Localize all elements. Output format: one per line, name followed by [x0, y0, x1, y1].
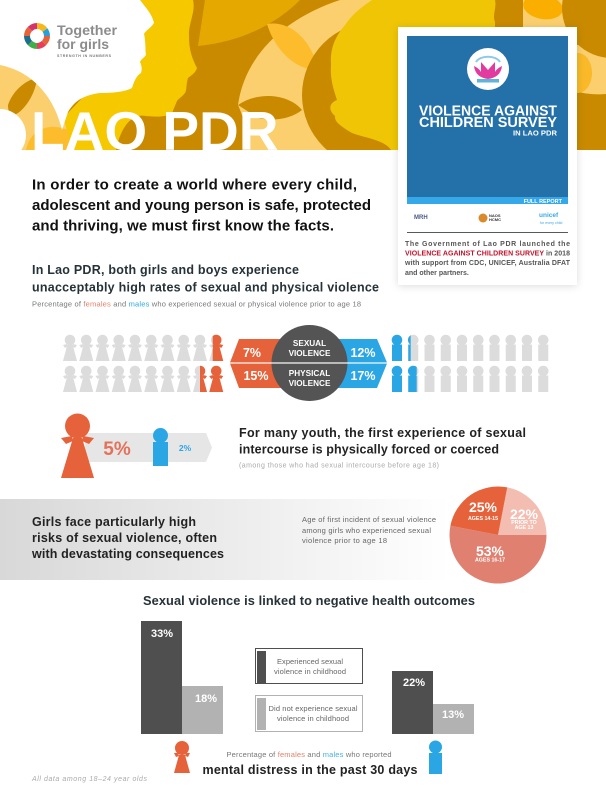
pictogram: males physical violence row: [392, 366, 549, 392]
legend: did not experience sexual violence: Did not experience sexual: [268, 704, 358, 713]
caption: mental distress: [202, 750, 418, 777]
report card: unicef: [539, 212, 559, 219]
forced first experience comparison: [61, 414, 212, 478]
panel: girls risk band: Age of first incident of sexual violence: [302, 515, 436, 524]
violence type hub with percentages: 15%: [243, 369, 269, 383]
legend: experienced sexual violence: Experienced sexual: [277, 657, 343, 666]
text: first sexual experience forced: (among those who had sexual intercourse before age 18): [239, 462, 439, 470]
icon: female figure: [174, 741, 190, 773]
report card: MRH: [414, 215, 428, 221]
intro statement: [32, 176, 371, 234]
footnote: All data among 18–24 year olds: [31, 776, 148, 783]
forced first experience comparison: 2%: [179, 443, 192, 453]
report card: NAOS: [489, 213, 501, 218]
pie chart: age of first incident: AGES 16-17: [475, 558, 505, 564]
heading: health outcomes: Sexual violence is linked to negative health outcomes: [143, 593, 475, 608]
legend: did not experience sexual violence: [256, 696, 362, 732]
report card: [398, 27, 577, 285]
logo: Together for Girls: for girls: [57, 37, 109, 52]
violence type hub with percentages: VIOLENCE: [289, 379, 331, 388]
subheading: high rates of violence: In Lao PDR, both girls and boys experience: [32, 263, 299, 277]
icon: male figure: [429, 740, 442, 774]
pictogram: females physical violence row: [63, 366, 223, 392]
bar chart: males: 13%: [442, 709, 464, 721]
text: first sexual experience forced: [239, 426, 526, 470]
intro statement: and thriving, we must first know the facts.: [32, 218, 334, 234]
subheading: high rates of violence: [32, 263, 379, 294]
panel: girls risk band: Girls face particularly high: [32, 515, 196, 529]
report card: CHILDREN SURVEY: [419, 115, 557, 131]
violence type hub with percentages: VIOLENCE: [289, 349, 331, 358]
subheading: high rates of violence: unacceptably high rates of sexual and physical violence: [32, 280, 379, 294]
pictogram: males sexual violence row: [392, 335, 549, 361]
legend: experienced sexual violence: [256, 648, 362, 684]
panel: girls risk band: among girls who experienced sexual: [302, 526, 431, 535]
pie chart: age of first incident: 25%: [469, 499, 498, 515]
pie chart: age of first incident: [450, 487, 547, 584]
report card: VIOLENCE AGAINST: [419, 104, 557, 120]
panel: girls risk band: violence prior to age 18: [302, 536, 387, 545]
report card: for every child: [540, 221, 562, 225]
legend: experienced sexual violence: violence in childhood: [274, 667, 346, 676]
intro statement: adolescent and young person is safe, protected: [32, 197, 371, 214]
report card: The Government of Lao PDR launched the: [405, 241, 570, 248]
pictogram: females sexual violence row: [63, 335, 223, 361]
forced first experience comparison: 5%: [103, 439, 131, 460]
intro statement: In order to create a world where every child,: [32, 176, 357, 194]
text: first sexual experience forced: intercourse is physically forced or coerced: [239, 442, 499, 456]
logo: Together for Girls: Together: [57, 23, 118, 38]
title: LAO PDR: LAO PDR: [31, 100, 278, 162]
bar chart: females: [141, 621, 223, 734]
header illustration: silhouettes: [0, 0, 606, 150]
logo: Together for Girls: STRENGTH IN NUMBERS: [57, 54, 112, 58]
violence type hub with percentages: 7%: [243, 346, 261, 360]
report card: with support from CDC, UNICEF, Australia DFAT: [404, 260, 571, 267]
caption: mental distress: mental distress in the past 30 days: [202, 763, 418, 777]
bar chart: males: 22%: [403, 677, 425, 689]
report card: VIOLENCE AGAINST CHILDREN SURVEY in 2018: [405, 250, 570, 258]
violence type hub with percentages: 17%: [350, 369, 376, 383]
violence type hub with percentages: 12%: [350, 346, 376, 360]
legend: did not experience sexual violence: violence in childhood: [277, 714, 349, 723]
bar chart: males: [392, 671, 474, 734]
chart caption: Percentage of females and males who experienced sexual or physical violence prior to age 18: [32, 300, 361, 308]
pie chart: age of first incident: AGES 14-15: [468, 516, 498, 522]
report card: and other partners.: [405, 270, 469, 277]
panel: girls risk band: risks of sexual violence, often: [32, 531, 217, 545]
pie chart: age of first incident: 53%: [476, 543, 505, 559]
bar chart: females: 18%: [195, 693, 217, 705]
text: first sexual experience forced: For many youth, the first experience of sexual: [239, 426, 526, 440]
panel: girls risk band: [0, 499, 450, 580]
violence type hub with percentages: SEXUAL: [293, 339, 326, 348]
pie chart: age of first incident: PRIOR TO: [511, 520, 537, 526]
report card: FULL REPORT: [524, 199, 563, 205]
logo: Together for Girls: [27, 23, 118, 58]
pie chart: age of first incident: 22%: [510, 506, 539, 522]
bar chart: females: 33%: [151, 628, 173, 640]
violence type hub with percentages: [230, 325, 387, 401]
panel: girls risk band: with devastating consequences: [31, 547, 224, 561]
caption: mental distress: Percentage of females and males who reported: [226, 750, 392, 759]
violence type hub with percentages: PHYSICAL: [289, 369, 330, 378]
pie chart: age of first incident: AGE 13: [515, 525, 533, 531]
report card: HCMC: [489, 217, 501, 222]
report card: IN LAO PDR: [513, 128, 558, 138]
